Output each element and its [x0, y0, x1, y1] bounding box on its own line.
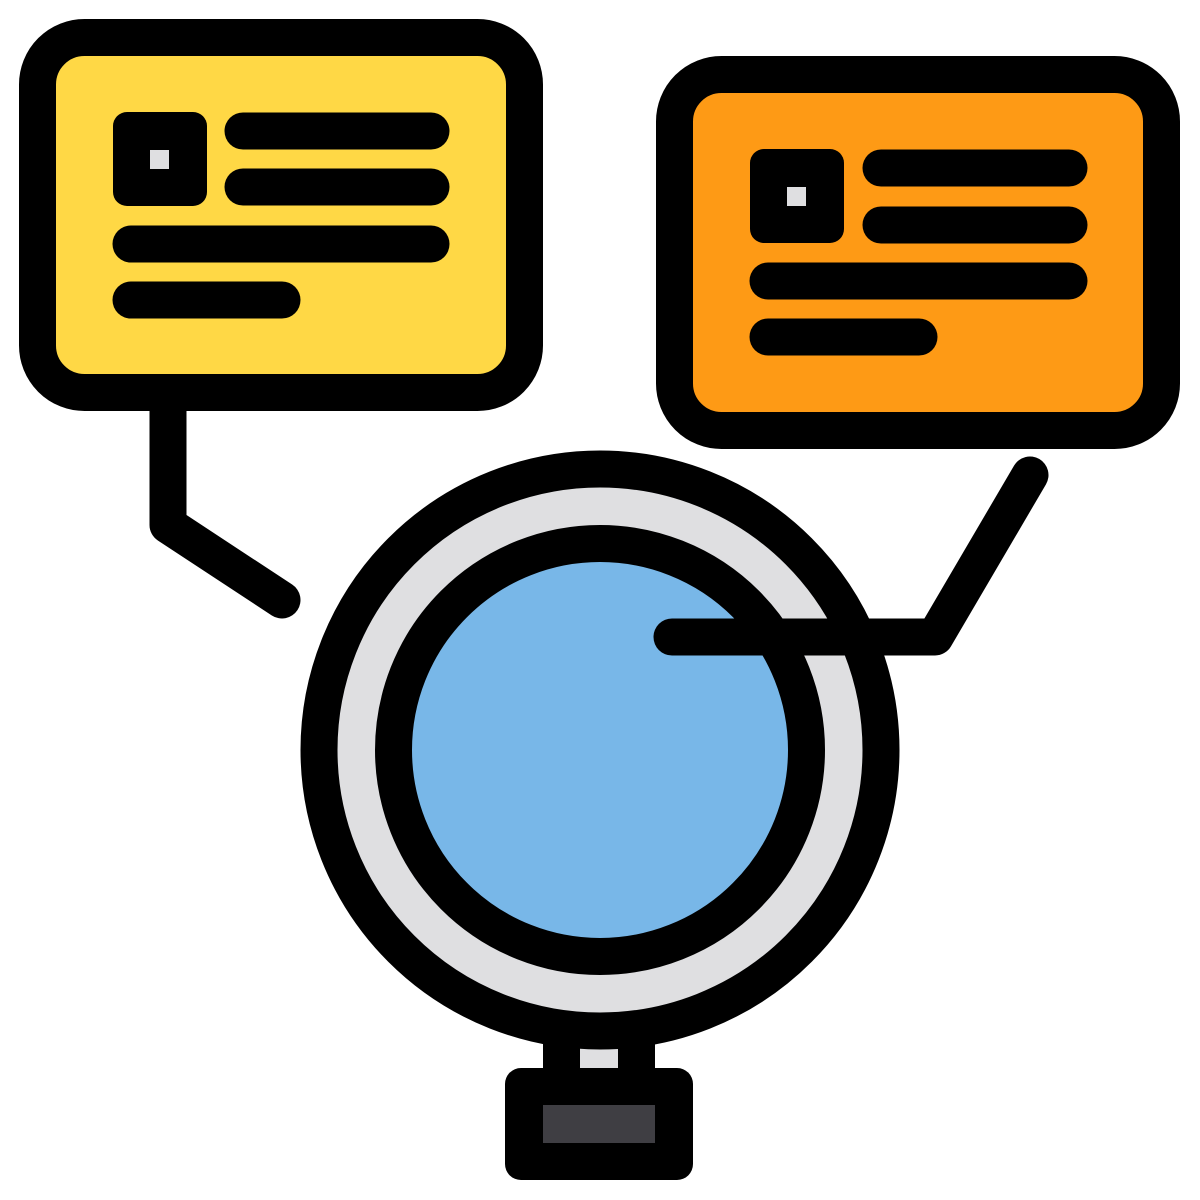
icon: checkbox yellow [113, 112, 207, 206]
arrow: orange bubble tail [672, 475, 1030, 637]
arrow: yellow bubble tail [168, 400, 282, 600]
icon: checkbox orange [750, 149, 844, 243]
text block: orange lines [768, 168, 1069, 337]
icon: magnifier handle [505, 1020, 693, 1180]
icon: magnifier lens [319, 469, 881, 1031]
panel: yellow speech bubble [38, 38, 524, 392]
panel: orange speech bubble [674, 74, 1162, 430]
text block: yellow lines [131, 131, 431, 300]
